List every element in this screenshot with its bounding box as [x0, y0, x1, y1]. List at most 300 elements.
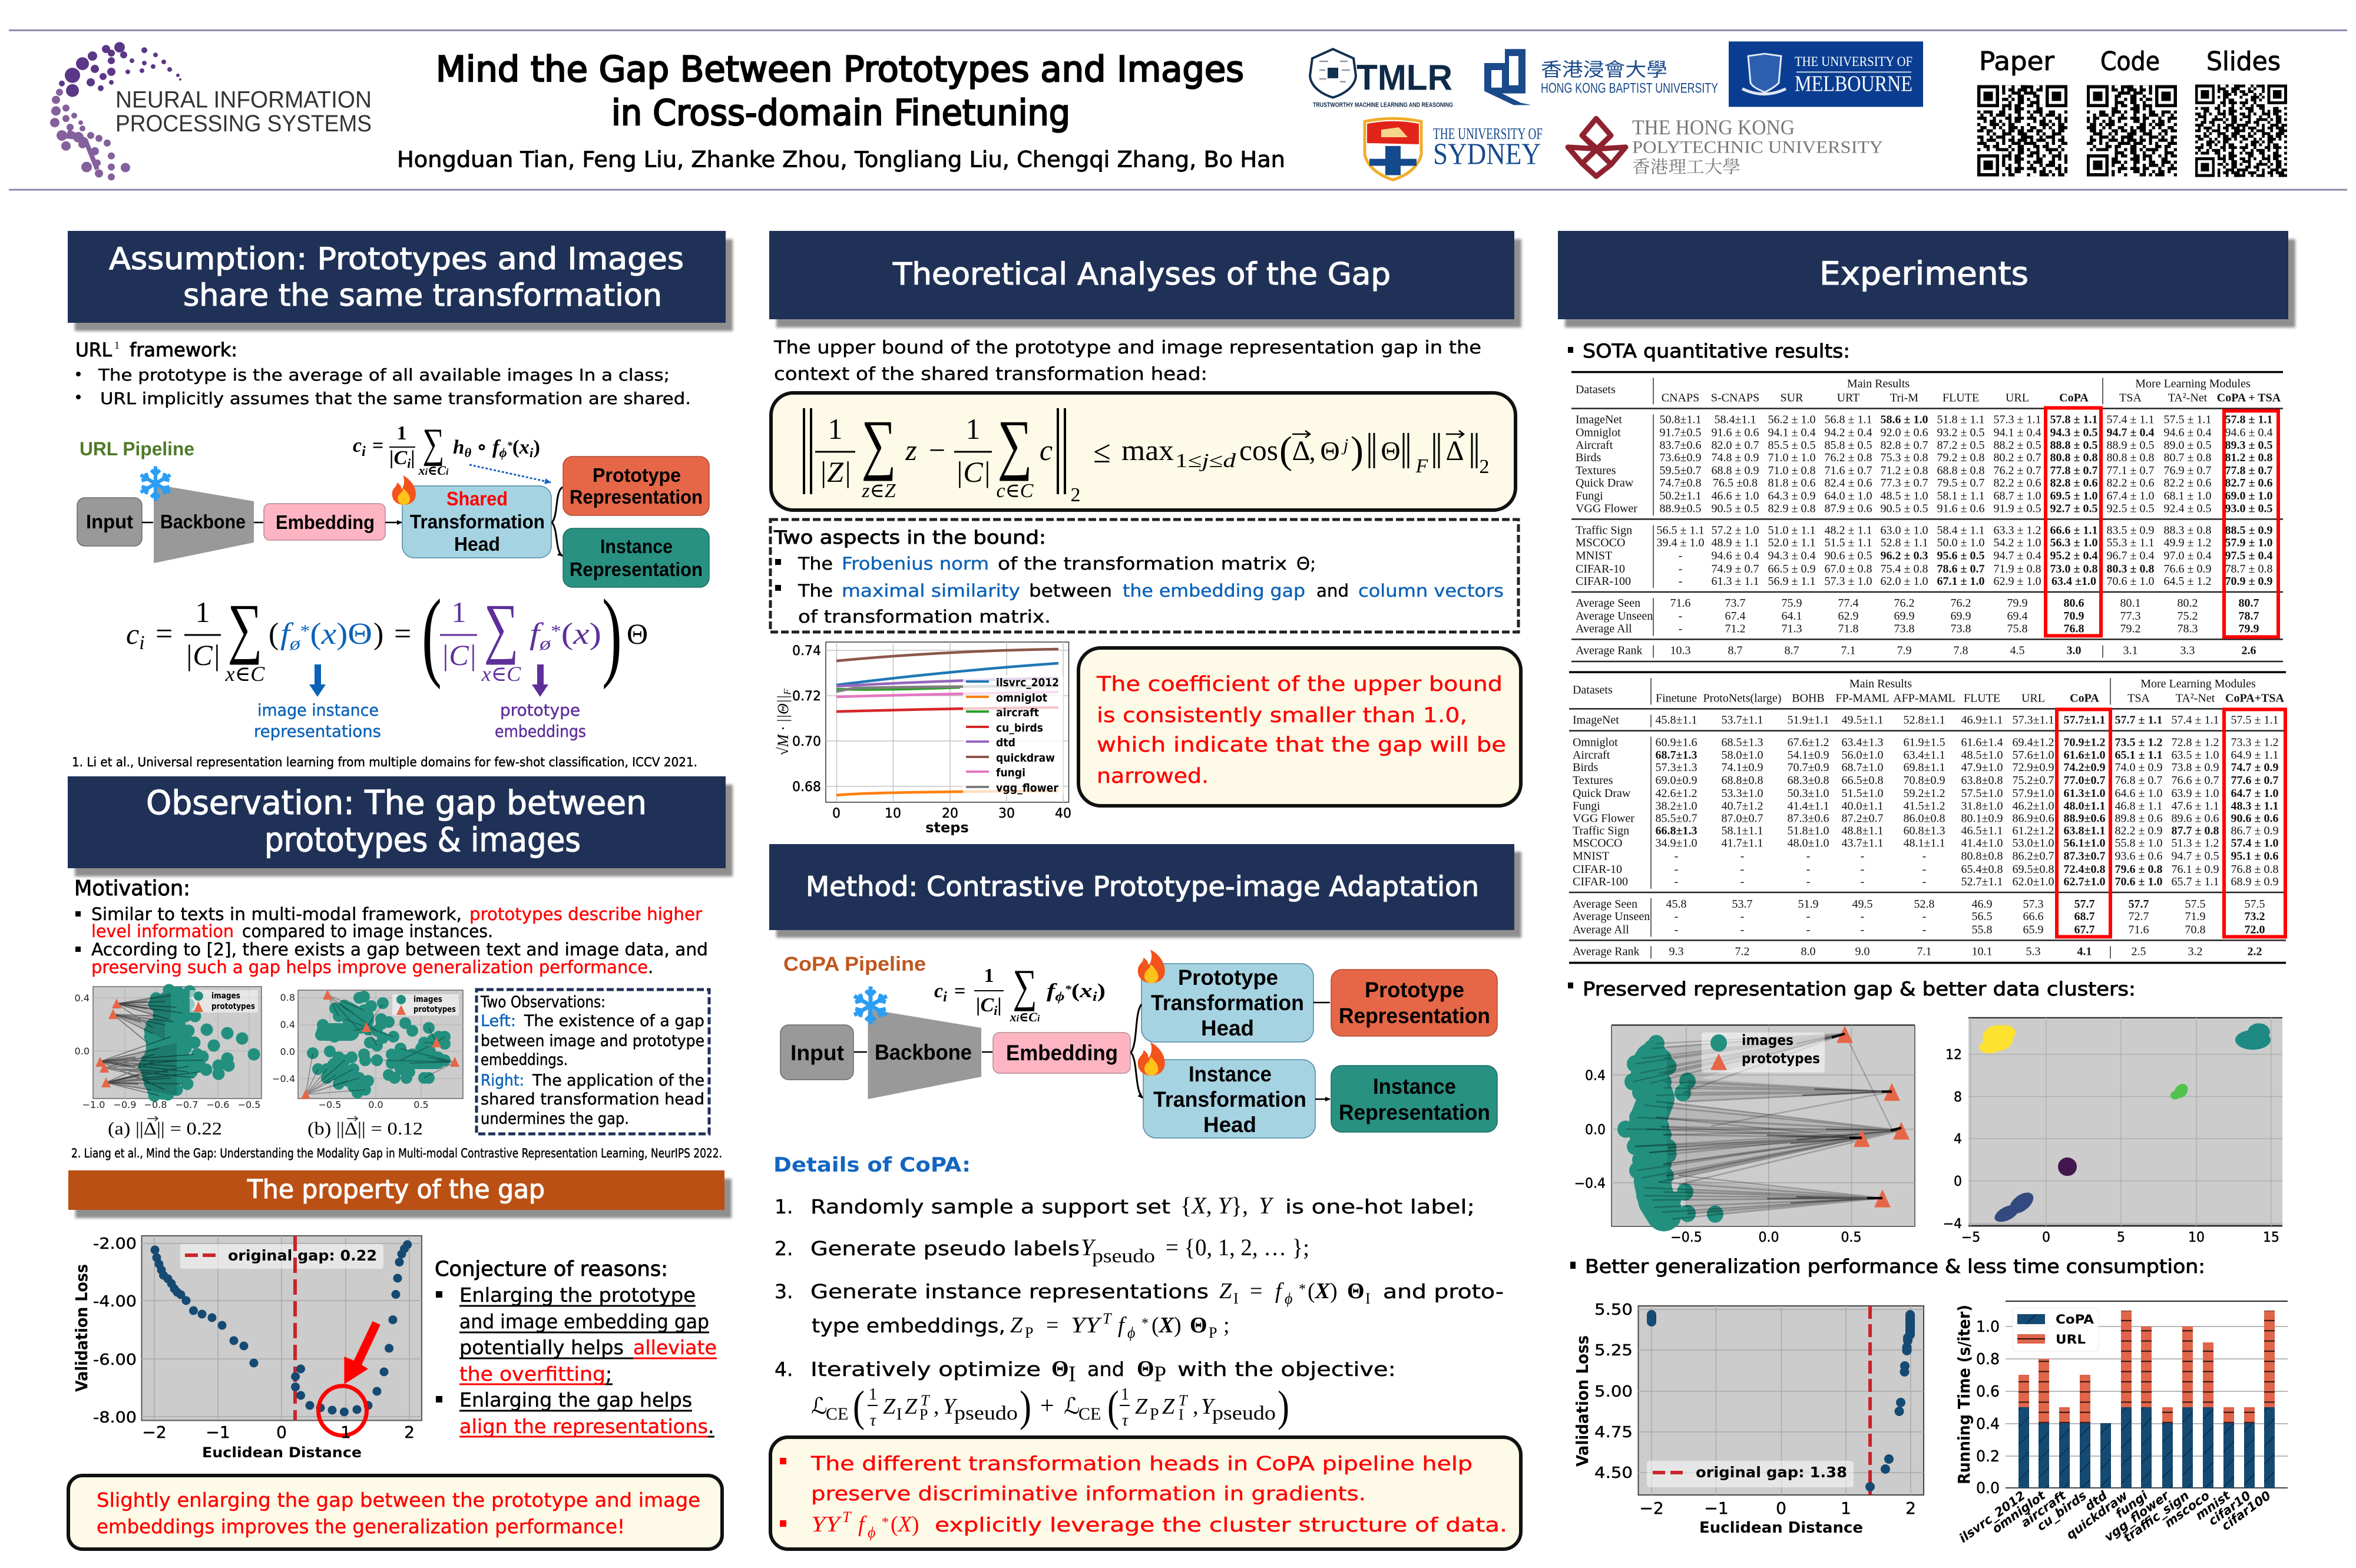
table: leave-one-out results: - — [1740, 863, 1744, 876]
table: seen and unseen results: 62.0 ± 1.0 — [1881, 575, 1928, 588]
table: leave-one-out results: 93.6 ± 0.6 — [2115, 850, 2162, 863]
table: seen and unseen results: 66.6 ± 1.1 — [2050, 524, 2097, 537]
step 3 — [775, 1279, 1504, 1341]
chart: norm coefficient over steps: steps — [925, 819, 969, 836]
step 4: Z — [883, 1394, 896, 1419]
table: leave-one-out results: 67.7 — [2074, 923, 2095, 936]
table: seen and unseen results: 94.6 ± 0.4 — [2164, 426, 2211, 439]
table: seen and unseen results: 58.4±1.1 — [1715, 413, 1756, 426]
formula: decomposition: 1 — [196, 596, 210, 628]
chart: data clusters: 15 — [2263, 1230, 2279, 1245]
table: leave-one-out results: 5.3 — [2026, 945, 2040, 958]
callout: two observations — [477, 990, 709, 1134]
table: leave-one-out results: 62.7±1.0 — [2064, 875, 2105, 888]
table: seen and unseen results: Traffic Sign — [1576, 524, 1632, 537]
step 3: YY — [1071, 1313, 1102, 1338]
step 3: type embeddings, — [812, 1314, 1005, 1337]
table: leave-one-out results: 51.8±1.0 — [1788, 824, 1829, 837]
logo: NeurIPS: PROCESSING SYSTEMS — [115, 111, 372, 137]
table: leave-one-out results: 94.7 ± 0.5 — [2172, 850, 2219, 863]
table: leave-one-out results: 48.1±1.1 — [1904, 837, 1945, 850]
table: leave-one-out results: - — [1675, 850, 1678, 863]
formula: decomposition: Θ — [627, 617, 648, 650]
formula: CoPA prototype: ϕ — [1055, 989, 1065, 1004]
table: seen and unseen results: 94.6 ± 0.4 — [2225, 426, 2272, 439]
table: leave-one-out results: 70.6 ± 1.0 — [2115, 875, 2162, 888]
table: leave-one-out results: 57.5 — [2185, 898, 2206, 911]
table: leave-one-out results: 42.6±1.2 — [1656, 787, 1697, 800]
formula: decomposition: ø — [289, 633, 301, 654]
table: seen and unseen results: 91.6 ± 0.6 — [1937, 502, 1984, 515]
chart: norm coefficient over steps: 30 — [998, 806, 1015, 821]
cluster: green — [2170, 1081, 2190, 1101]
table: seen and unseen results: 80.2 — [2177, 597, 2198, 610]
diagram: URL pipeline: Head — [454, 533, 500, 555]
logo: University of Melbourne: MELBOURNE — [1795, 72, 1912, 97]
table: leave-one-out results: 60.8±1.3 — [1904, 824, 1945, 837]
table: seen and unseen results: 77.3 — [2120, 610, 2141, 623]
table: seen and unseen results: 64.5 ± 1.2 — [2164, 575, 2211, 588]
table: leave-one-out results — [1569, 661, 2286, 963]
table: leave-one-out results: Quick Draw — [1573, 787, 1631, 800]
step 3: = — [1250, 1279, 1262, 1304]
table: seen and unseen results: 89.0 ± 0.5 — [2164, 439, 2211, 452]
formula: decomposition: ) — [373, 617, 383, 651]
formula: CoPA prototype: |C — [976, 994, 994, 1016]
chart: scatter (a): −0.6 — [207, 1099, 229, 1110]
table: leave-one-out results: 76.1 ± 0.9 — [2172, 863, 2219, 876]
table: leave-one-out results: 66.5±0.8 — [1842, 774, 1883, 787]
table: seen and unseen results: 64.0 ± 1.0 — [1825, 489, 1872, 502]
table: seen and unseen results: 67.0 ± 0.8 — [1825, 563, 1872, 575]
table: leave-one-out results: 73.8 ± 0.9 — [2172, 761, 2219, 774]
table: seen and unseen results: 76.9 ± 0.7 — [2164, 464, 2211, 477]
heading: property — [68, 1170, 724, 1210]
chart: scatter (a): 0.4 — [75, 993, 90, 1004]
chart: validation loss vs distance: Validation Loss — [72, 1264, 91, 1392]
chart: data clusters: −4 — [1943, 1216, 1962, 1232]
chart: norm coefficient over steps: fungi — [996, 766, 1025, 779]
chart: prototype-image gap scatter: 0.4 — [1585, 1068, 1606, 1083]
step 2 — [775, 1234, 1309, 1267]
table: leave-one-out results: 3.2 — [2188, 945, 2203, 958]
diagram: CoPA pipeline: Transformation — [1153, 1087, 1306, 1112]
table: seen and unseen results: 88.2 ± 0.5 — [1994, 439, 2041, 452]
table: seen and unseen results: 3.1 — [2123, 644, 2137, 657]
chart: data clusters: 12 — [1945, 1047, 1962, 1063]
formula: class prototype: ) — [533, 436, 540, 458]
table: seen and unseen results: 91.6 ± 0.6 — [1712, 426, 1759, 439]
table: leave-one-out results: Average Unseen — [1573, 910, 1650, 923]
table: leave-one-out results: - — [1922, 863, 1926, 876]
table: leave-one-out results: 2.5 — [2131, 945, 2146, 958]
step 2: Y — [1081, 1234, 1096, 1261]
step 1: Y — [1259, 1192, 1274, 1219]
table: seen and unseen results: 63.3 ± 1.2 — [1994, 524, 2041, 537]
heading: assumption: Assumption: Prototypes and Images — [109, 242, 684, 277]
diagram: CoPA pipeline: CoPA Pipeline — [783, 953, 926, 975]
callout: two observations: The application of the — [532, 1071, 704, 1090]
table: leave-one-out results: Main Results — [1849, 677, 1912, 690]
table: leave-one-out results: - — [1861, 850, 1864, 863]
table: seen and unseen results: ImageNet — [1576, 413, 1622, 426]
text: conjecture of reasons: ; — [605, 1362, 612, 1385]
table: leave-one-out results: - — [1740, 910, 1744, 923]
text: motivation: According to [2], there exists a gap between text and image data, and — [91, 940, 708, 960]
callout: method summary: explicitly leverage the cluster structure of data. — [935, 1513, 1507, 1536]
step 4: Z — [905, 1394, 918, 1419]
table: leave-one-out results: 68.7 — [2074, 910, 2095, 923]
chart: scatter (b): −0.5 — [319, 1099, 341, 1110]
table: leave-one-out results: 61.9±1.5 — [1904, 736, 1945, 749]
chart: running time: aircraft — [2019, 1488, 2069, 1530]
step 2: 2. — [775, 1237, 793, 1260]
formula: decomposition: = — [155, 617, 173, 651]
chart: scatter (b): (b) ||Δ|| = 0.12 — [307, 1118, 423, 1139]
table: leave-one-out results: TA²-Net — [2176, 692, 2215, 704]
formula: decomposition: i — [139, 632, 145, 654]
table: seen and unseen results: CIFAR-100 — [1576, 575, 1631, 588]
table: seen and unseen results: 95.2 ± 0.4 — [2050, 550, 2097, 563]
chart: validation loss CoPA: 5.00 — [1594, 1383, 1633, 1401]
chart: validation loss CoPA — [1573, 1301, 1924, 1537]
chart: norm coefficient over steps: vgg_flower — [996, 782, 1059, 795]
table: leave-one-out results: 57.9±1.0 — [2013, 787, 2054, 800]
table: seen and unseen results: 50.2±1.1 — [1660, 489, 1701, 502]
table: leave-one-out results: - — [1806, 923, 1810, 936]
table: leave-one-out results: 70.9±1.2 — [2064, 736, 2105, 749]
table: leave-one-out results: MNIST — [1573, 850, 1609, 863]
table: seen and unseen results: 94.2 ± 0.4 — [1825, 426, 1872, 439]
formula box: upper bound: , — [1309, 437, 1316, 466]
table: seen and unseen results: 57.4 ± 1.1 — [2107, 413, 2154, 426]
step 3: * — [1141, 1316, 1149, 1331]
step 4: 1 — [1121, 1385, 1129, 1404]
icon: flame — [392, 475, 416, 505]
callout: coefficient: The coefficient of the upper bound — [1096, 673, 1503, 696]
table: leave-one-out results: 51.3 ± 1.2 — [2172, 837, 2219, 850]
diagram: URL pipeline: Embedding — [276, 511, 375, 533]
chart: validation loss vs distance: Euclidean Distance — [202, 1444, 362, 1461]
formula: CoPA prototype: ( — [1071, 980, 1080, 1002]
table: leave-one-out results: 86.0±0.8 — [1904, 812, 1945, 825]
callout: method summary: * — [882, 1515, 889, 1530]
chart: running time: 1.0 — [1976, 1318, 2000, 1336]
table: leave-one-out results: 61.2±1.2 — [2013, 824, 2054, 837]
table: seen and unseen results: 71.0 ± 1.0 — [1768, 451, 1815, 464]
table: seen and unseen results: 50.0 ± 1.0 — [1937, 537, 1984, 550]
callout: method summary — [770, 1437, 1521, 1549]
table: seen and unseen results: 66.5 ± 0.9 — [1768, 563, 1815, 575]
table: leave-one-out results: 49.5±1.1 — [1842, 713, 1883, 727]
formula box: upper bound: 2 — [1480, 456, 1489, 478]
chart: data clusters: 5 — [2117, 1230, 2125, 1245]
table: leave-one-out results: - — [1740, 850, 1744, 863]
table: seen and unseen results: 2.6 — [2242, 644, 2256, 657]
table: seen and unseen results: 75.9 — [1781, 597, 1802, 610]
callout: two observations: between image and prototype — [481, 1032, 704, 1050]
diagram: CoPA pipeline: Prototype — [1365, 978, 1464, 1002]
chart: prototype-image gap scatter: 0.0 — [1585, 1122, 1606, 1137]
table: leave-one-out results: Average All — [1573, 923, 1629, 936]
labels under equation: image instance — [257, 700, 379, 720]
table: leave-one-out results: 47.6 ± 1.1 — [2172, 799, 2219, 812]
table: leave-one-out results: 76.8 ± 0.7 — [2115, 774, 2162, 787]
formula: class prototype: i — [407, 456, 411, 471]
table: leave-one-out results: 54.1±0.9 — [1788, 749, 1829, 762]
formula: decomposition: * — [300, 621, 310, 641]
callout: coefficient: which indicate that the gap will be — [1097, 733, 1506, 757]
formula box: upper bound — [771, 393, 1515, 510]
table: seen and unseen results: 80.7 ± 0.8 — [2164, 451, 2211, 464]
table: leave-one-out results: 63.4±1.1 — [1904, 749, 1945, 762]
table: seen and unseen results: CoPA + TSA — [2217, 391, 2281, 404]
table: seen and unseen results: 76.2 — [1950, 597, 1971, 610]
table: leave-one-out results: 75.2±0.7 — [2013, 774, 2054, 787]
chart: validation loss CoPA: 5.25 — [1594, 1342, 1633, 1359]
table: seen and unseen results: 64.1 — [1781, 610, 1802, 623]
chart: scatter (a): −1.0 — [82, 1099, 105, 1110]
table: seen and unseen results: 54.2 ± 1.0 — [1994, 537, 2041, 550]
text: motivation: Similar to texts in multi-modal framework, — [91, 904, 462, 924]
table: seen and unseen results: - — [1679, 575, 1682, 588]
callout: two aspects: of the transformation matrix — [998, 554, 1287, 574]
table: seen and unseen results: Main Results — [1847, 377, 1910, 390]
table: seen and unseen results: Textures — [1576, 464, 1616, 477]
formula box: upper bound: c∈C — [997, 480, 1034, 502]
step 3: Θ — [1190, 1313, 1207, 1338]
table: seen and unseen results: 94.7 ± 0.4 — [2107, 426, 2154, 439]
cluster: yellow — [1979, 1025, 2016, 1053]
logo: PolyU: 香港理工大學 — [1632, 158, 1740, 177]
chart: running time: Running Time (s/iter) — [1954, 1305, 1974, 1484]
table: seen and unseen results: Tri-M — [1890, 391, 1918, 404]
table: leave-one-out results: 63.9 ± 1.0 — [2172, 787, 2219, 800]
labels under equation: prototype — [500, 700, 580, 720]
chart: validation loss CoPA: 5.50 — [1594, 1301, 1633, 1319]
text: conjecture of reasons: . — [708, 1415, 714, 1438]
table: leave-one-out results: - — [1806, 910, 1810, 923]
QR code: code — [2087, 85, 2177, 176]
formula: CoPA prototype: = — [954, 980, 965, 1002]
table: leave-one-out results: FLUTE — [1964, 692, 2000, 704]
table: leave-one-out results: 65.1 ± 1.1 — [2115, 749, 2162, 762]
heading: method — [769, 844, 1514, 930]
diagram: URL pipeline — [77, 421, 709, 587]
table: leave-one-out results: 82.2 ± 0.9 — [2115, 824, 2162, 837]
chart: norm coefficient over steps: dtd — [996, 736, 1015, 749]
table: seen and unseen results: 61.3 ± 1.1 — [1712, 575, 1759, 588]
table: seen and unseen results: 75.8 — [2007, 622, 2028, 635]
callout: coefficient: narrowed. — [1097, 765, 1209, 788]
chart: running time: URL — [2056, 1332, 2086, 1347]
table: seen and unseen results: 95.6 ± 0.5 — [1937, 550, 1984, 563]
table: leave-one-out results: 73.5 ± 1.2 — [2115, 736, 2162, 749]
callout: two aspects: and — [1316, 581, 1349, 601]
chart: running time: CoPA — [2056, 1312, 2094, 1326]
table: leave-one-out results: 48.5±1.0 — [1961, 749, 2003, 762]
table: leave-one-out results: 41.5±1.2 — [1904, 799, 1945, 812]
chart: validation loss vs distance: −1 — [206, 1423, 230, 1442]
heading: experiments: Experiments — [1819, 255, 2029, 292]
table: seen and unseen results: 57.2 ± 1.0 — [1712, 524, 1759, 537]
table: seen and unseen results: 94.3 ± 0.4 — [1768, 550, 1815, 563]
step 3: I — [1233, 1290, 1239, 1307]
formula: CoPA prototype: * — [1065, 983, 1072, 995]
table: seen and unseen results: 88.9±0.5 — [1660, 502, 1701, 515]
logo: TMLR: TRUSTWORTHY MACHINE LEARNING AND REASONING — [1313, 101, 1453, 108]
table: seen and unseen results: TA²-Net — [2168, 391, 2208, 404]
chart: scatter (b): 0.0 — [280, 1046, 295, 1057]
chart: running time: traffic_sign — [2121, 1488, 2192, 1545]
table: seen and unseen results: 73.8 — [1894, 622, 1915, 635]
table: leave-one-out results: 86.7 ± 0.9 — [2231, 824, 2278, 837]
table: leave-one-out results: 2.2 — [2248, 945, 2262, 958]
table: leave-one-out results: 61.6±1.4 — [1961, 736, 2003, 749]
table: seen and unseen results: 90.5 ± 0.5 — [1712, 502, 1759, 515]
text: conjecture of reasons: and image embedding gap — [459, 1310, 709, 1333]
text: conjecture of reasons: Enlarging the gap helps — [459, 1388, 692, 1411]
table: leave-one-out results: 89.8 ± 0.6 — [2115, 812, 2162, 825]
chart: prototype-image gap scatter: 0.5 — [1841, 1230, 1861, 1245]
table: seen and unseen results: VGG Flower — [1576, 502, 1637, 515]
table: leave-one-out results: 74.1±0.9 — [1722, 761, 1763, 774]
step 3: f — [1275, 1279, 1284, 1304]
table: seen and unseen results: 96.2 ± 0.3 — [1881, 550, 1928, 563]
table: leave-one-out results: Omniglot — [1573, 736, 1618, 749]
formula: decomposition: ( — [561, 617, 573, 651]
table: leave-one-out results: 95.1 ± 0.6 — [2231, 850, 2278, 863]
chart: norm coefficient over steps: omniglot — [996, 692, 1047, 704]
step 4: Y — [943, 1394, 958, 1419]
step 4: Z — [1162, 1394, 1175, 1419]
heading: observation: Observation: The gap between — [146, 784, 647, 822]
formula: class prototype: ϕ — [499, 445, 507, 460]
chart: norm coefficient over steps: 0.70 — [792, 735, 821, 749]
step 4: ( — [1107, 1382, 1119, 1431]
logo: NeurIPS: NEURAL INFORMATION — [115, 87, 372, 113]
formula: decomposition: ∑ — [484, 590, 518, 665]
heading: property: The property of the gap — [247, 1175, 545, 1205]
table: seen and unseen results: 69.5 ± 1.0 — [2050, 489, 2097, 502]
callout: method summary: (X) — [891, 1512, 919, 1537]
formula: CoPA prototype: x — [1080, 980, 1090, 1002]
table: leave-one-out results: 70.7±0.9 — [1788, 761, 1829, 774]
table: leave-one-out results: 49.5 — [1852, 898, 1873, 911]
table: seen and unseen results: 94.1 ± 0.4 — [1994, 426, 2041, 439]
step 3: ; — [1223, 1313, 1230, 1338]
table: seen and unseen results: 82.8 ± 0.7 — [1881, 439, 1928, 452]
chart: validation loss CoPA: −1 — [1704, 1498, 1729, 1518]
table: seen and unseen results: 93.0 ± 0.5 — [2225, 502, 2272, 515]
chart: data clusters: 10 — [2188, 1230, 2205, 1245]
table: leave-one-out results: 70.8 — [2185, 923, 2206, 936]
table: leave-one-out results: 77.0±0.7 — [2064, 774, 2105, 787]
diagram: URL pipeline: URL Pipeline — [80, 438, 194, 459]
step 3: ϕ — [1285, 1290, 1292, 1307]
table: seen and unseen results: 68.7 ± 1.0 — [1994, 489, 2041, 502]
chart: prototype-image gap scatter — [1574, 1025, 1915, 1245]
table: seen and unseen results: 71.8 — [1838, 622, 1859, 635]
table: seen and unseen results: 78.6 ± 0.7 — [1937, 563, 1984, 575]
diagram: URL pipeline: Shared — [446, 488, 508, 510]
formula: class prototype: c — [353, 435, 362, 456]
table: seen and unseen results: 87.2 ± 0.5 — [1937, 439, 1984, 452]
table: seen and unseen results: 71.2 ± 0.8 — [1881, 464, 1928, 477]
step 4: CE — [826, 1404, 848, 1424]
table: leave-one-out results: 63.4±1.3 — [1842, 736, 1883, 749]
table: seen and unseen results: Fungi — [1576, 489, 1603, 502]
step 4: ) — [1020, 1382, 1031, 1431]
callout: two observations: Two Observations: — [480, 993, 605, 1011]
formula box: upper bound: − — [929, 434, 945, 467]
table: seen and unseen results: Omniglot — [1576, 426, 1621, 439]
step 3: P — [1025, 1324, 1033, 1341]
callout: two aspects: Two aspects in the bound: — [773, 527, 1046, 548]
table: seen and unseen results: 68.1 ± 1.0 — [2164, 489, 2211, 502]
table: seen and unseen results: - — [1679, 550, 1682, 563]
table: seen and unseen results: 76.2 ± 0.8 — [1825, 451, 1872, 464]
chart: norm coefficient over steps: quickdraw — [996, 752, 1055, 765]
chart: scatter (b): 0.8 — [280, 992, 295, 1003]
logo: University of Sydney: THE UNIVERSITY OF — [1433, 125, 1543, 143]
formula: CoPA prototype — [934, 961, 1106, 1024]
table: seen and unseen results: 93.2 ± 0.5 — [1937, 426, 1984, 439]
chart: scatter (b): 0.5 — [413, 1099, 429, 1110]
chart: scatter (b): −0.4 — [272, 1073, 295, 1084]
chart: scatter (a) — [75, 987, 262, 1139]
table: leave-one-out results: 65.4±0.8 — [1961, 863, 2003, 876]
formula: class prototype: h — [453, 436, 464, 458]
table: leave-one-out results: 59.2±1.2 — [1904, 787, 1945, 800]
formula box: upper bound: Θ — [1381, 436, 1401, 466]
table: seen and unseen results: 57.9 ± 1.0 — [2225, 537, 2272, 550]
callout: two aspects: The — [798, 554, 833, 574]
table: leave-one-out results: 57.7 ± 1.1 — [2115, 713, 2162, 727]
logo: Hong Kong Baptist University: 香港浸會大學 — [1541, 59, 1667, 80]
table: seen and unseen results: Quick Draw — [1576, 477, 1634, 489]
icon: flame — [1138, 1042, 1165, 1076]
table: leave-one-out results: 65.9 — [2023, 923, 2044, 936]
labels under equation — [254, 700, 586, 741]
table: leave-one-out results: CIFAR-100 — [1573, 875, 1628, 888]
table: leave-one-out results: ProtoNets(large) — [1703, 692, 1781, 704]
table: leave-one-out results: 68.5±1.3 — [1722, 736, 1763, 749]
table: leave-one-out results: 53.3±1.0 — [1722, 787, 1763, 800]
chart: validation loss vs distance — [72, 1235, 422, 1461]
text: URL framework: URL implicitly assumes that the same transformation are shared. — [100, 389, 691, 408]
table: leave-one-out results: AFP-MAML — [1893, 692, 1955, 704]
step 3: Z — [1010, 1313, 1023, 1338]
table: seen and unseen results: More Learning Modules — [2135, 377, 2251, 390]
chart: running time: cifar10 — [2206, 1488, 2254, 1529]
chart: scatter (b) — [272, 990, 463, 1139]
chart: validation loss vs distance: -4.00 — [93, 1293, 137, 1311]
chart: data clusters: −5 — [1961, 1230, 1980, 1245]
table: seen and unseen results: 94.7 ± 0.4 — [1994, 550, 2041, 563]
table: seen and unseen results — [1571, 372, 2283, 658]
table: leave-one-out results: 45.8 — [1666, 898, 1687, 911]
chart: norm coefficient over steps: 0.74 — [792, 644, 821, 659]
table: seen and unseen results: 57.3 ± 1.0 — [1825, 575, 1872, 588]
cluster: blue — [1992, 1188, 2037, 1225]
table: leave-one-out results: 41.4±1.0 — [1961, 837, 2003, 850]
step 4: , — [934, 1394, 939, 1419]
table: seen and unseen results: 55.3 ± 1.1 — [2107, 537, 2154, 550]
table: seen and unseen results: 74.8 ± 0.9 — [1712, 451, 1759, 464]
step 4: τ — [870, 1411, 876, 1430]
step 3: 3. — [775, 1280, 793, 1303]
